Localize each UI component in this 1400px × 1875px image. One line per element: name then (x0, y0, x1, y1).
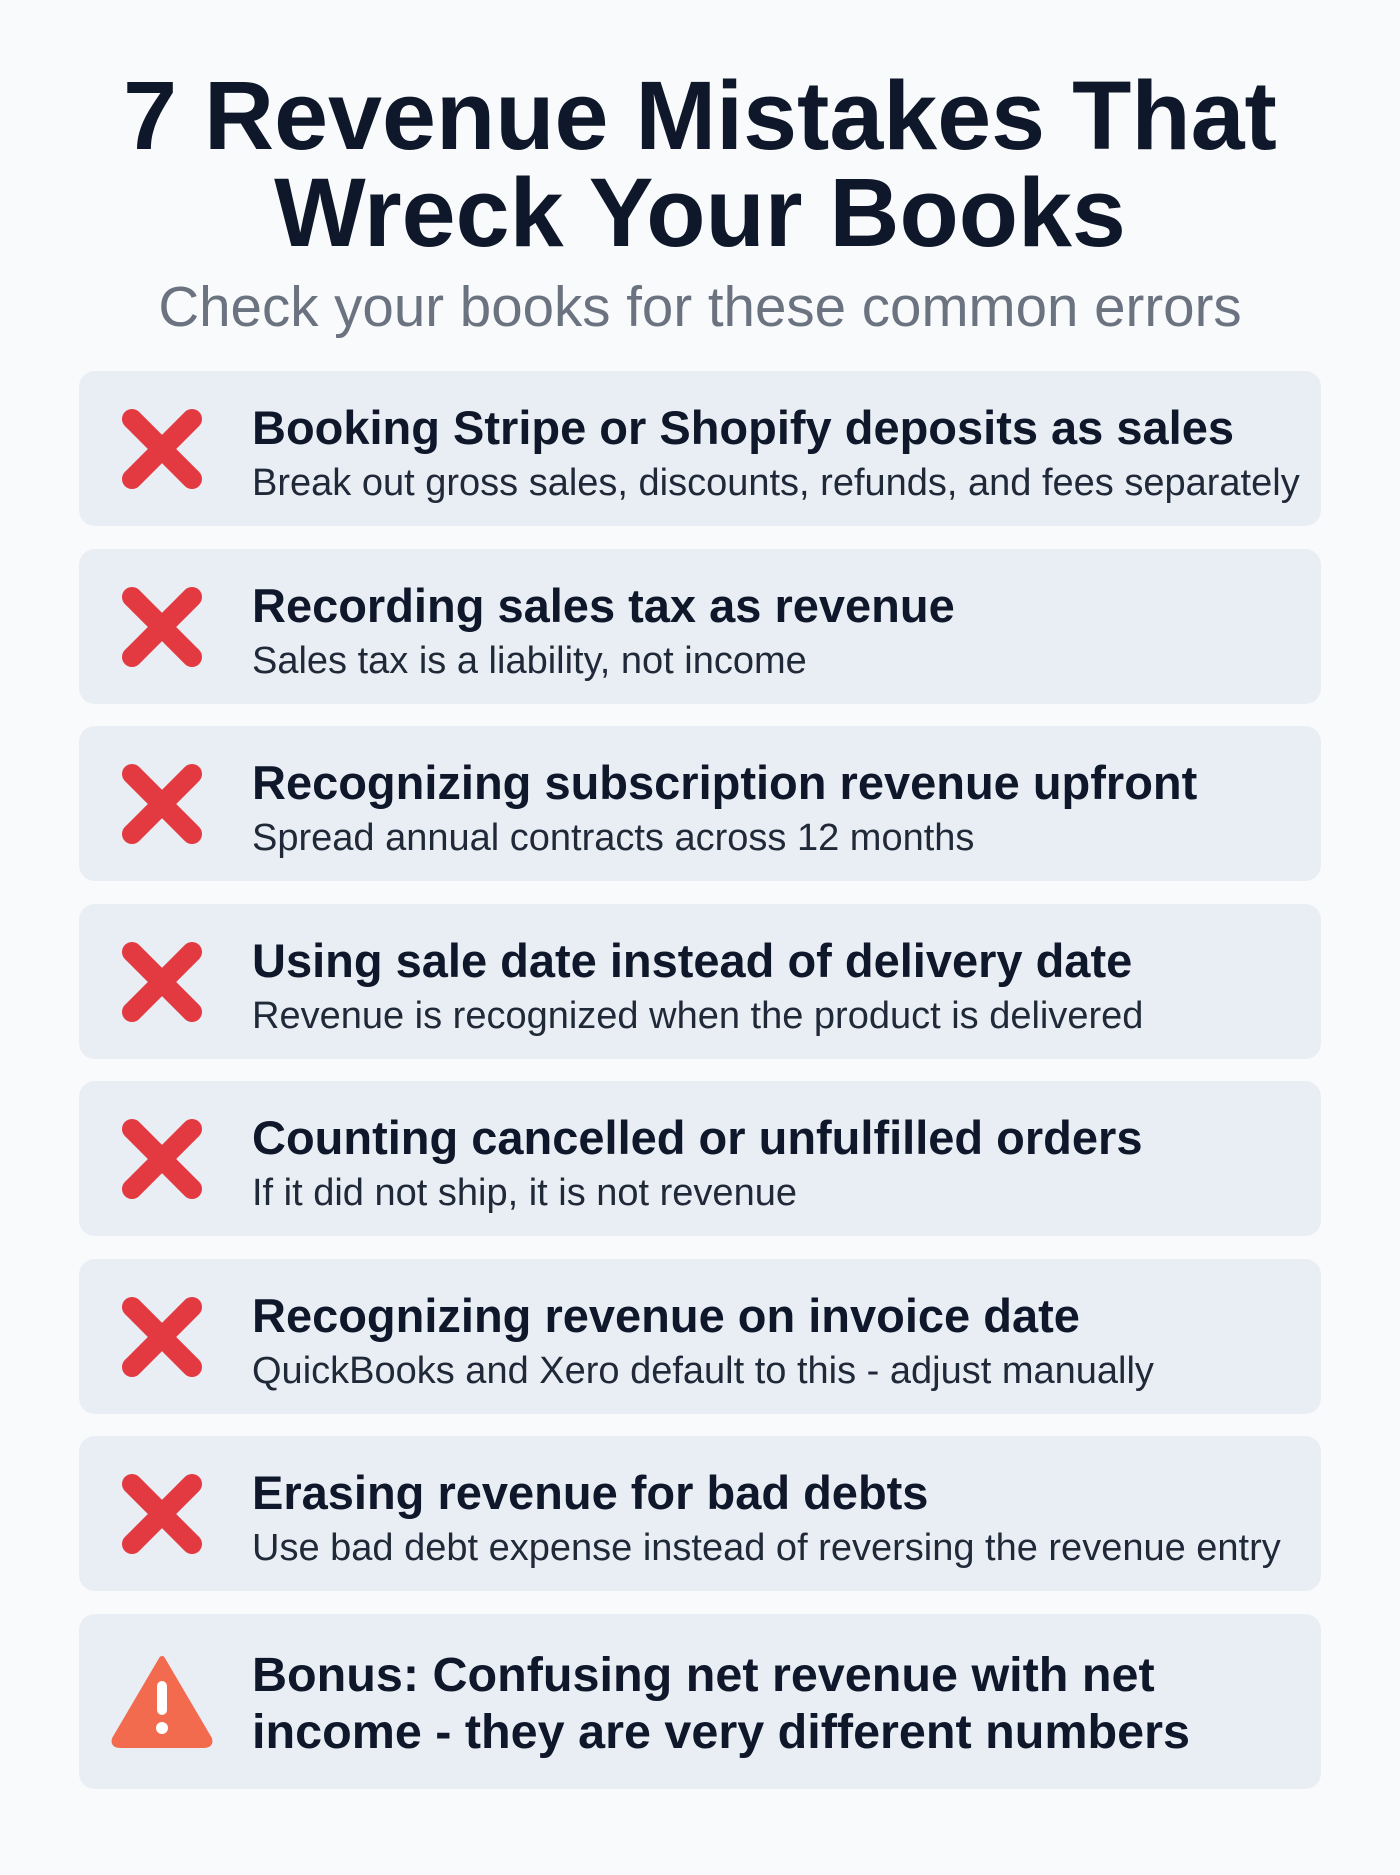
icon: red x (122, 409, 202, 489)
text 3: Spread annual contracts across 12 months (252, 817, 974, 859)
icon: red x (122, 1474, 202, 1554)
icon: red x (122, 1297, 202, 1377)
text 4: Revenue is recognized when the product is delivered (252, 995, 1143, 1037)
icon: red x (122, 587, 202, 667)
text 2: Sales tax is a liability, not income (252, 640, 807, 682)
bonus heading (252, 1648, 1190, 1759)
card 5 (79, 1081, 1321, 1236)
heading 1: Booking Stripe or Shopify deposits as sales (252, 401, 1234, 454)
heading 5: Counting cancelled or unfulfilled orders (252, 1111, 1142, 1164)
text 5: If it did not ship, it is not revenue (252, 1172, 797, 1214)
heading 4: Using sale date instead of delivery date (252, 934, 1132, 987)
bonus heading: income - they are very different numbers (252, 1705, 1190, 1759)
subtitle: Check your books for these common errors (158, 275, 1242, 338)
card 7 (79, 1436, 1321, 1591)
icon: red x (122, 1119, 202, 1199)
card 6 (79, 1259, 1321, 1414)
heading 6: Recognizing revenue on invoice date (252, 1289, 1080, 1342)
card 3 (79, 726, 1321, 881)
card: bonus (79, 1614, 1321, 1789)
heading 2: Recording sales tax as revenue (252, 579, 955, 632)
icon: red x (122, 942, 202, 1022)
icon: warning triangle (112, 1656, 212, 1748)
card 4 (79, 904, 1321, 1059)
title (123, 61, 1277, 267)
heading 3: Recognizing subscription revenue upfront (252, 756, 1197, 809)
icon: red x (122, 764, 202, 844)
card 2 (79, 549, 1321, 704)
title: Wreck Your Books (274, 158, 1126, 267)
bonus heading: Bonus: Confusing net revenue with net (252, 1648, 1155, 1702)
text 1: Break out gross sales, discounts, refunds, and fees separately (252, 462, 1300, 504)
heading 7: Erasing revenue for bad debts (252, 1466, 928, 1519)
text 7: Use bad debt expense instead of reversing the revenue entry (252, 1527, 1281, 1569)
text 6: QuickBooks and Xero default to this - adjust manually (252, 1350, 1154, 1392)
title: 7 Revenue Mistakes That (123, 61, 1277, 170)
card 1 (79, 371, 1321, 526)
